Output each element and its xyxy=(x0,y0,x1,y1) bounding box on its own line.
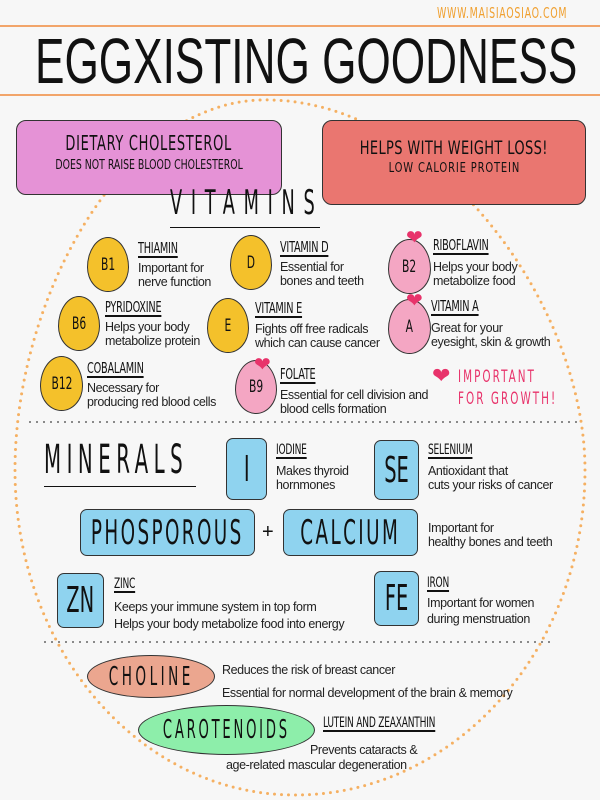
vitamin E: VITAMIN E xyxy=(255,299,302,317)
mineral selenium: SELENIUM xyxy=(428,442,472,458)
vitamin B6: PYRIDOXINE xyxy=(105,298,161,316)
vitamin E: Fights off free radicals xyxy=(255,322,368,336)
mineral iodine: IODINE xyxy=(276,442,307,458)
mineral iodine: hornmones xyxy=(276,478,335,492)
vitamin A xyxy=(388,290,550,354)
phosporous + calcium: Important for xyxy=(428,521,494,535)
panel: weight loss: LOW CALORIE PROTEIN xyxy=(388,161,520,176)
vitamin B6: Helps your body xyxy=(105,320,189,334)
vitamin B9 xyxy=(235,354,428,416)
vitamin A: eyesight, skin & growth xyxy=(431,335,550,349)
vitamin D xyxy=(230,235,364,290)
vitamin A: ❤ xyxy=(406,290,423,312)
mineral iron: FE xyxy=(385,578,408,619)
callout: important for growth: IMPORTANT xyxy=(458,367,536,387)
callout: important for growth: FOR GROWTH! xyxy=(458,389,557,409)
vitamin B12: COBALAMIN xyxy=(87,359,144,377)
carotenoids xyxy=(138,705,436,772)
vitamin B2: B2 xyxy=(402,256,417,276)
vitamin D: VITAMIN D xyxy=(280,238,328,256)
carotenoids: age-related mascular degeneration xyxy=(226,758,407,772)
carotenoids: LUTEIN AND ZEAXANTHIN xyxy=(323,715,435,731)
vitamin B1 xyxy=(87,237,211,292)
mineral zinc xyxy=(57,573,345,631)
mineral zinc: Helps your body metabolize food into energy xyxy=(114,617,344,631)
vitamin B2: metabolize food xyxy=(433,274,515,288)
mineral iodine: I xyxy=(244,448,249,490)
panel: dietary cholesterol: DOES NOT RAISE BLOOD CHOLESTEROL xyxy=(55,158,243,173)
vitamin B2: Helps your body xyxy=(433,260,517,274)
mineral zinc: Keeps your immune system in top form xyxy=(114,600,316,614)
vitamin A: VITAMIN A xyxy=(431,297,479,315)
vitamin B6: metabolize protein xyxy=(105,334,200,348)
heading: vitamins: VITAMINS xyxy=(170,183,323,223)
vitamin A: Great for your xyxy=(431,321,503,335)
vitamin D: D xyxy=(247,252,255,272)
phosporous + calcium: healthy bones and teeth xyxy=(428,535,552,549)
vitamin D: bones and teeth xyxy=(280,274,364,288)
mineral iodine: Makes thyroid xyxy=(276,464,349,478)
heading: minerals: MINERALS xyxy=(44,437,188,483)
vitamin B2: ❤ xyxy=(406,227,423,249)
choline: CHOLINE xyxy=(109,662,194,692)
mineral zinc: ZINC xyxy=(114,576,135,592)
choline: Essential for normal development of the brain & memory xyxy=(222,686,512,700)
mineral iron xyxy=(374,571,534,626)
vitamin B12: producing red blood cells xyxy=(87,395,216,409)
vitamin B2 xyxy=(388,227,518,294)
phosporous + calcium: + xyxy=(262,521,274,543)
mineral iodine xyxy=(226,438,349,500)
vitamin B2: RIBOFLAVIN xyxy=(433,236,489,254)
vitamin B9: Essential for cell division and xyxy=(280,388,428,402)
panel: dietary cholesterol: DIETARY CHOLESTEROL xyxy=(66,131,232,155)
vitamin B6 xyxy=(58,296,200,351)
vitamin B12 xyxy=(40,356,216,411)
panel: weight loss: HELPS WITH WEIGHT LOSS! xyxy=(360,137,548,159)
vitamin B9: B9 xyxy=(249,377,263,397)
mineral selenium: SE xyxy=(384,450,409,490)
callout: important for growth xyxy=(432,363,557,409)
choline xyxy=(87,655,513,700)
carotenoids: CAROTENOIDS xyxy=(163,715,290,745)
vitamin A: A xyxy=(406,316,413,336)
panel: weight loss xyxy=(322,120,586,205)
choline: Reduces the risk of breast cancer xyxy=(222,663,395,677)
vitamin D: Essential for xyxy=(280,260,344,274)
mineral selenium xyxy=(374,440,553,500)
mineral iron: during menstruation xyxy=(427,612,530,626)
vitamin E: which can cause cancer xyxy=(255,336,380,350)
mineral selenium: cuts your risks of cancer xyxy=(428,478,553,492)
vitamin B6: B6 xyxy=(72,314,86,334)
carotenoids: Prevents cataracts & xyxy=(310,743,417,757)
mineral zinc: ZN xyxy=(67,580,94,621)
vitamin B12: Necessary for xyxy=(87,381,159,395)
phosporous + calcium: CALCIUM xyxy=(301,512,400,552)
vitamin B12: B12 xyxy=(51,374,72,394)
phosporous + calcium: PHOSPOROUS xyxy=(91,512,244,552)
panel: dietary cholesterol xyxy=(16,120,282,195)
mineral iron: Important for women xyxy=(427,596,534,610)
mineral selenium: Antioxidant that xyxy=(428,464,508,478)
vitamin B1: THIAMIN xyxy=(138,239,178,257)
vitamin B9: FOLATE xyxy=(280,365,315,383)
callout: important for growth: ❤ xyxy=(432,363,450,388)
vitamin B9: ❤ xyxy=(254,354,271,376)
phosporous + calcium xyxy=(80,509,552,556)
vitamin B1: B1 xyxy=(101,254,115,274)
mineral iron: IRON xyxy=(427,575,449,591)
vitamin E xyxy=(207,298,380,353)
url: WWW.MAISIAOSIAO.COM xyxy=(437,4,567,22)
vitamin B9: blood cells formation xyxy=(280,402,386,416)
title: EGGXISTING GOODNESS xyxy=(35,25,577,97)
vitamin B1: nerve function xyxy=(138,275,211,289)
vitamin E: E xyxy=(225,316,231,336)
vitamin B1: Important for xyxy=(138,261,204,275)
